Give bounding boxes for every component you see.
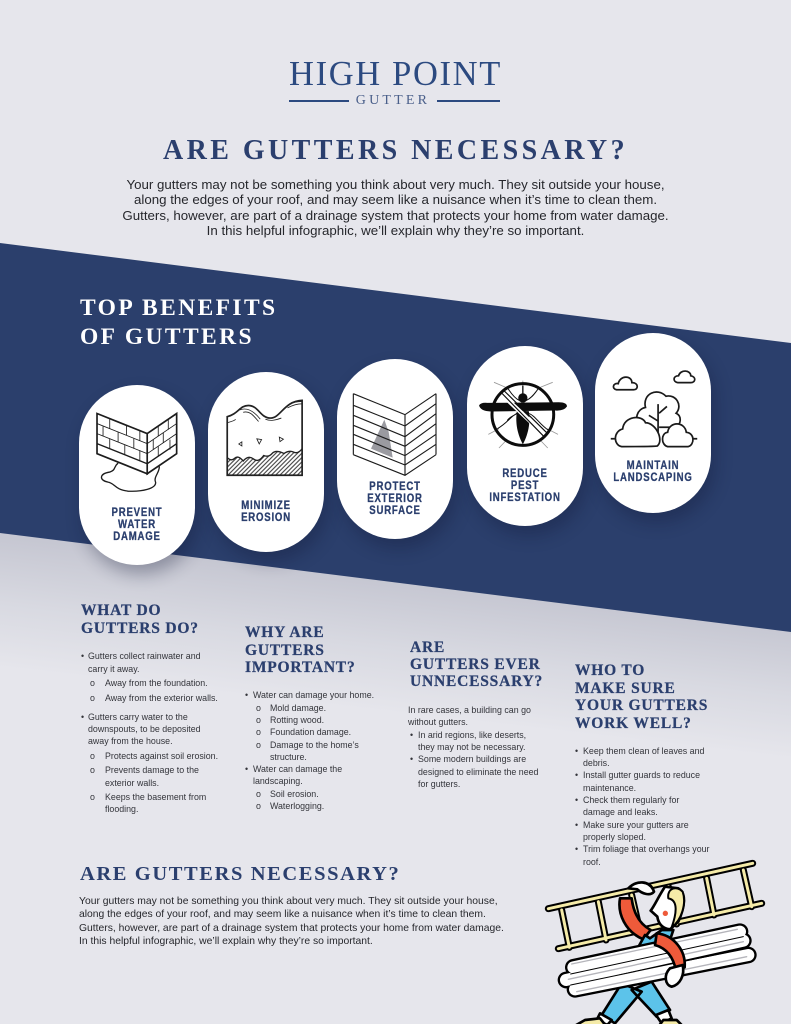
list: Trim foliage that overhangs your (583, 844, 710, 854)
label (241, 498, 291, 524)
list: o (90, 765, 95, 775)
label: EXTERIOR (367, 491, 423, 505)
list: maintenance. (583, 783, 636, 793)
list: debris. (583, 758, 610, 768)
ladder (548, 863, 762, 949)
label: WATER (118, 517, 156, 531)
list: o (256, 727, 261, 737)
list: o (256, 703, 261, 713)
heading (81, 602, 199, 637)
list: o (256, 789, 261, 799)
panel: protect exterior surface (337, 359, 453, 539)
intro text: Gutters, however, are part of a drainage system that protects your home from water damage. (122, 208, 669, 223)
list: • (81, 651, 84, 661)
label: PROTECT (369, 479, 421, 493)
heading: GUTTERS EVER (410, 656, 541, 673)
heading: MAKE SURE (575, 680, 676, 697)
list: • (245, 764, 248, 774)
list: • (410, 754, 413, 764)
list (81, 651, 218, 814)
list: • (81, 712, 84, 722)
heading (410, 639, 543, 690)
label: INFESTATION (489, 490, 561, 504)
logo: GUTTER (356, 93, 430, 108)
list: Away from the exterior walls. (105, 693, 218, 703)
icon: trees and clouds (610, 370, 698, 448)
list: downspouts, to be deposited (88, 724, 201, 734)
list: o (90, 792, 95, 802)
list: landscaping. (253, 776, 303, 786)
list: o (90, 678, 95, 688)
label: DAMAGE (113, 529, 161, 543)
list: Keep them clean of leaves and (583, 746, 704, 756)
column: why are gutters important (245, 624, 374, 811)
torso and head (619, 882, 684, 950)
list: Foundation damage. (270, 727, 351, 737)
list: Prevents damage to the (105, 765, 199, 775)
label (613, 458, 693, 484)
intro text (122, 177, 669, 238)
list: Install gutter guards to reduce (583, 770, 700, 780)
label: EROSION (241, 510, 291, 524)
list: structure. (270, 752, 307, 762)
label (367, 479, 423, 517)
column: who to make sure (575, 662, 710, 867)
list: In rare cases, a building can go (408, 705, 531, 715)
list (245, 690, 374, 811)
bottom text: Gutters, however, are part of a drainage system that protects your home from water damage. (79, 923, 504, 934)
list: • (245, 690, 248, 700)
title: ARE GUTTERS NECESSARY? (163, 135, 628, 166)
list: Mold damage. (270, 703, 326, 713)
list: Keeps the basement from (105, 792, 206, 802)
bottom text: Your gutters may not be something you think about very much. They sit outside your house, (79, 896, 498, 907)
label: MAINTAIN (627, 458, 679, 472)
list: In arid regions, like deserts, (418, 730, 526, 740)
column: are gutters ever unnecessary (408, 639, 543, 789)
list: Some modern buildings are (418, 754, 526, 764)
bottom text: In this helpful infographic, we’ll explain why they’re so important. (79, 936, 373, 947)
list: • (575, 795, 578, 805)
heading (575, 662, 708, 732)
list: they may not be necessary. (418, 742, 526, 752)
logo: HIGH POINT (289, 55, 502, 93)
list: Soil erosion. (270, 789, 319, 799)
label: REDUCE (502, 466, 548, 480)
list (408, 705, 538, 789)
list: exterior walls. (105, 778, 159, 788)
heading: IMPORTANT? (245, 659, 356, 676)
list: flooding. (105, 804, 138, 814)
bottom text (79, 896, 504, 947)
intro text: Your gutters may not be something you think about very much. They sit outside your house, (126, 177, 665, 192)
label: MINIMIZE (241, 498, 291, 512)
list: Water can damage your home. (253, 690, 374, 700)
list: Gutters collect rainwater and (88, 651, 201, 661)
list: carry it away. (88, 664, 139, 674)
illustration: worker carrying ladder and gutters (544, 860, 766, 1024)
icon: crossed-out mosquito (479, 380, 567, 448)
label (112, 505, 162, 543)
panel: prevent water damage (79, 385, 195, 565)
heading: WORK WELL? (575, 715, 692, 732)
list: o (256, 801, 261, 811)
list: Waterlogging. (270, 801, 324, 811)
list: • (575, 770, 578, 780)
list: o (90, 751, 95, 761)
panel: maintain landscaping (595, 333, 711, 513)
list: Away from the foundation. (105, 678, 208, 688)
icon: soil erosion cross-section (226, 400, 303, 476)
panel: reduce pest infestation (467, 346, 583, 526)
heading: top benefits (80, 295, 278, 350)
list: • (575, 820, 578, 830)
label: PEST (511, 478, 539, 492)
bottom text: along the edges of your roof, and may seem like a nuisance when it’s time to clean them. (79, 909, 486, 920)
column: what do gutters do (81, 602, 218, 814)
list: Gutters carry water to the (88, 712, 188, 722)
gutter bundle (566, 929, 748, 992)
list: o (256, 740, 261, 750)
intro text: along the edges of your roof, and may seem like a nuisance when it’s time to clean them. (134, 192, 657, 207)
list: Rotting wood. (270, 715, 324, 725)
list: • (575, 844, 578, 854)
front arm (655, 933, 685, 987)
label: SURFACE (369, 503, 421, 517)
panel: minimize erosion (208, 372, 324, 552)
heading: ARE (410, 639, 445, 656)
icon: brick wall with puddle (96, 412, 178, 492)
list: Water can damage the (253, 764, 342, 774)
heading: top benefits: OF GUTTERS (80, 324, 254, 350)
list: Check them regularly for (583, 795, 679, 805)
heading (245, 624, 356, 676)
icon: siding corner (352, 393, 437, 476)
list: away from the house. (88, 736, 173, 746)
list: for gutters. (418, 779, 460, 789)
heading: WHO TO (575, 662, 645, 679)
list: designed to eliminate the need (418, 767, 538, 777)
list: o (90, 693, 95, 703)
heading: WHAT DO (81, 602, 161, 619)
list (575, 746, 710, 867)
heading: UNNECESSARY? (410, 673, 543, 690)
heading: WHY ARE (245, 624, 325, 641)
heading: top benefits: TOP BENEFITS (80, 295, 278, 321)
list: properly sloped. (583, 832, 646, 842)
list: without gutters. (408, 717, 468, 727)
heading: YOUR GUTTERS (575, 697, 708, 714)
list: Damage to the home’s (270, 740, 359, 750)
list: damage and leaks. (583, 807, 658, 817)
label: PREVENT (112, 505, 162, 519)
list: o (256, 715, 261, 725)
intro text: In this helpful infographic, we’ll explain why they’re so important. (207, 223, 584, 238)
heading: GUTTERS (245, 642, 325, 659)
list: Protects against soil erosion. (105, 751, 218, 761)
label (489, 466, 561, 504)
list: roof. (583, 857, 601, 867)
heading: GUTTERS DO? (81, 620, 199, 637)
list: Make sure your gutters are (583, 820, 689, 830)
legs (573, 982, 683, 1024)
label: LANDSCAPING (613, 470, 693, 484)
list: • (410, 730, 413, 740)
bottom heading: ARE GUTTERS NECESSARY? (80, 863, 400, 885)
list: • (575, 746, 578, 756)
